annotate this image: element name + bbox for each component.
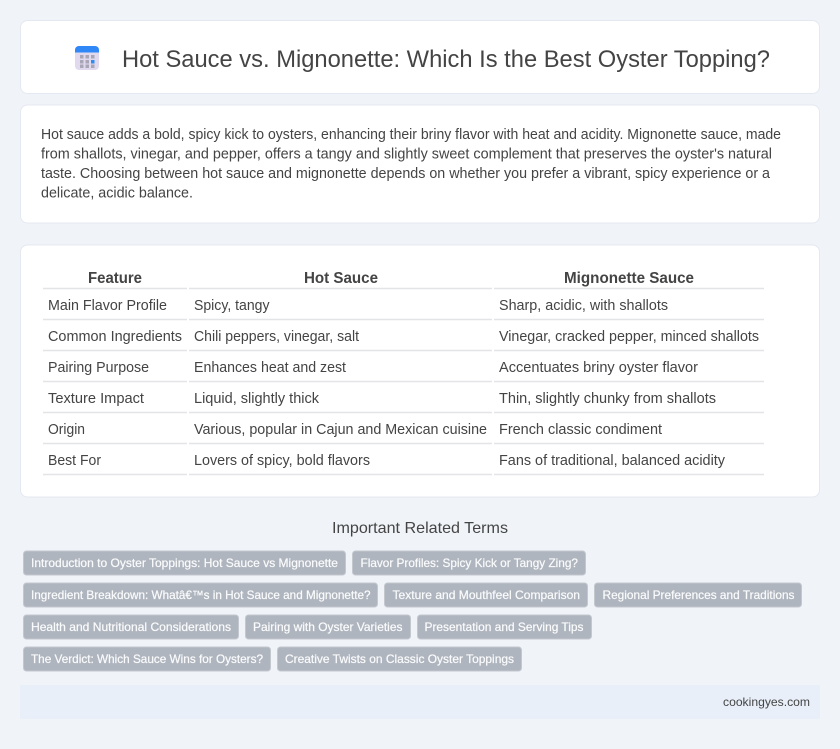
table row: pairing purpose: Accentuates briny oyster flavor (499, 360, 698, 376)
table row: common ingredients: Chili peppers, vinegar, salt (194, 329, 359, 345)
table header (88, 270, 694, 287)
intro text block: taste. Choosing between hot sauce and mignonette depends on whether you prefer a vibrant, spicy experience or a (41, 166, 770, 182)
tag: The Verdict: Which Sauce Wins for Oysters? (31, 652, 263, 666)
table row: texture impact (48, 391, 716, 407)
tag (24, 647, 270, 671)
table row: origin: French classic condiment (499, 422, 662, 438)
tag (24, 551, 346, 575)
table row: main flavor profile: Spicy, tangy (194, 298, 270, 314)
tag (246, 615, 410, 639)
table row: common ingredients: Common Ingredients (48, 329, 182, 345)
intro text block: from shallots, vinegar, and pepper, offers a tangy and slightly sweet complement that preserves the oyster's natural (41, 146, 772, 162)
table row: main flavor profile (48, 298, 668, 314)
footer source: cookingyes.com (723, 695, 810, 709)
table row: best for: Fans of traditional, balanced acidity (499, 453, 726, 469)
table row: common ingredients: Vinegar, cracked pepper, minced shallots (499, 329, 759, 345)
table row: pairing purpose: Enhances heat and zest (194, 360, 346, 376)
table header: Hot Sauce (304, 270, 378, 287)
table row: texture impact: Texture Impact (48, 391, 144, 407)
table row: texture impact: Thin, slightly chunky from shallots (499, 391, 716, 407)
tag: Ingredient Breakdown: Whatâ€™s in Hot Sauce and Mignonette? (31, 588, 371, 602)
tag: Introduction to Oyster Toppings: Hot Sauce vs Mignonette (31, 556, 338, 570)
table row: main flavor profile: Sharp, acidic, with shallots (499, 298, 668, 314)
table row: best for (48, 453, 726, 469)
table row: main flavor profile: Main Flavor Profile (48, 298, 167, 314)
tag: Regional Preferences and Traditions (602, 588, 794, 602)
table header: Mignonette Sauce (564, 270, 694, 287)
tag: Texture and Mouthfeel Comparison (392, 588, 580, 602)
tag (418, 615, 592, 639)
tag (384, 583, 588, 607)
table row: common ingredients (48, 329, 759, 345)
tag: Creative Twists on Classic Oyster Toppings (285, 652, 514, 666)
tag (278, 647, 522, 671)
panel: intro paragraph (20, 105, 820, 223)
tag (24, 583, 378, 607)
table row: origin: Various, popular in Cajun and Mexican cuisine (194, 422, 487, 438)
table row: origin (48, 422, 662, 438)
table row: pairing purpose (48, 360, 698, 376)
tag: Flavor Profiles: Spicy Kick or Tangy Zing? (360, 556, 578, 570)
tag (352, 551, 586, 575)
intro text block: delicate, acidic balance. (41, 186, 193, 202)
table row: best for: Lovers of spicy, bold flavors (194, 453, 370, 469)
title: Hot Sauce vs. Mignonette: Which Is the Best Oyster Topping? (122, 46, 770, 73)
icon: calendar (75, 46, 99, 70)
footer (20, 685, 820, 719)
intro text block (41, 127, 781, 202)
table row: best for: Best For (48, 453, 101, 469)
table row: texture impact: Liquid, slightly thick (194, 391, 320, 407)
tag (594, 583, 802, 607)
table row: pairing purpose: Pairing Purpose (48, 360, 149, 376)
table header: Feature (88, 270, 142, 287)
table row: origin: Origin (48, 422, 85, 438)
panel: title header (20, 20, 820, 94)
tag: Health and Nutritional Considerations (31, 620, 231, 634)
tag: Presentation and Serving Tips (424, 620, 584, 634)
heading: related terms: Important Related Terms (332, 520, 508, 537)
tag (24, 615, 238, 639)
tag cloud: related terms (24, 551, 802, 671)
panel: comparison table (20, 245, 820, 497)
intro text block: Hot sauce adds a bold, spicy kick to oysters, enhancing their briny flavor with heat and acidity. Mignonette sauce, made (41, 127, 781, 143)
tag: Pairing with Oyster Varieties (253, 620, 402, 634)
